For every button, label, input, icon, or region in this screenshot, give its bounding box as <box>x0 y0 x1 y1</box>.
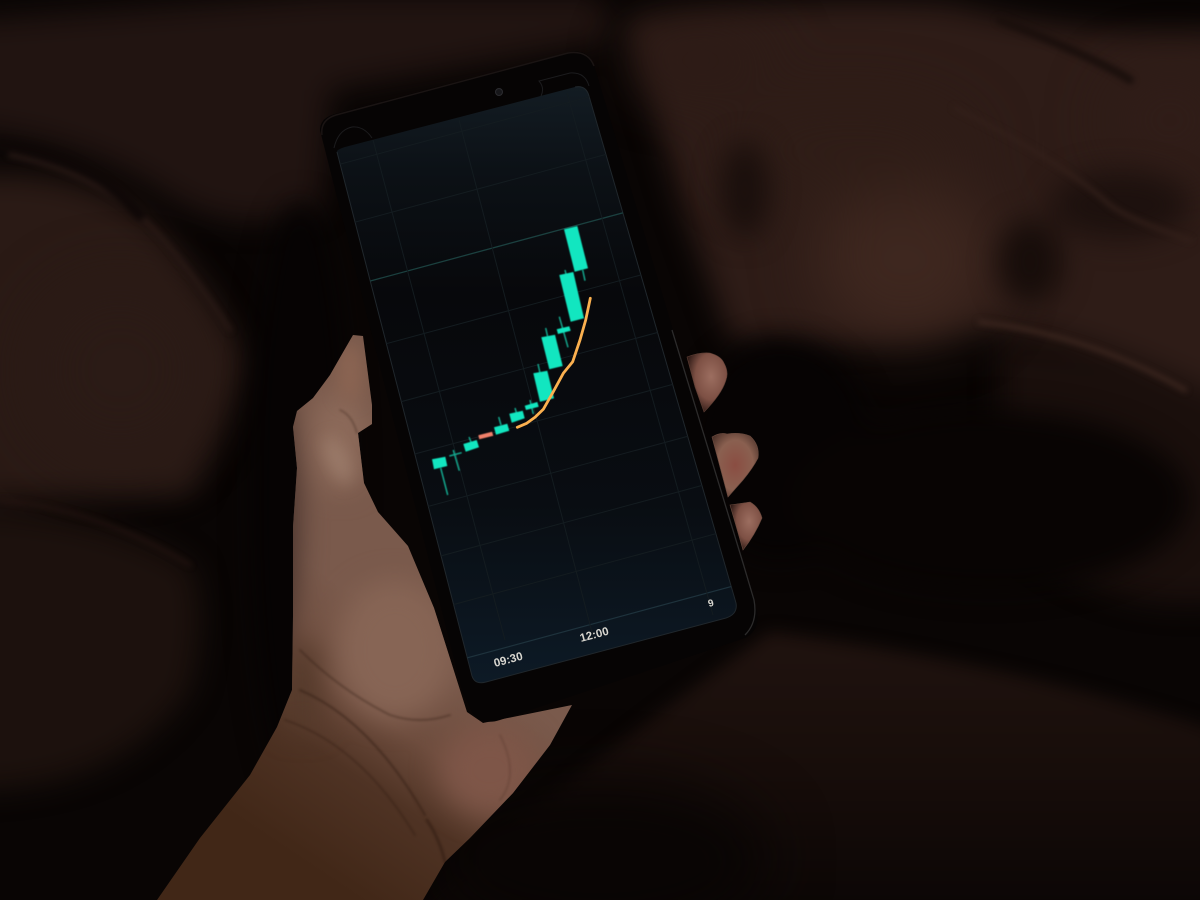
thumb tip highlight <box>336 342 364 402</box>
hand base shape <box>157 335 572 900</box>
right side edge highlight <box>672 330 755 635</box>
front camera <box>496 88 502 96</box>
finger one <box>687 353 727 412</box>
top glass outline <box>334 73 589 148</box>
phone body <box>320 52 758 722</box>
time axis labels: 12:00 <box>579 626 610 645</box>
time axis labels: 09:30 <box>493 651 524 670</box>
chart grid <box>340 148 731 658</box>
candlestick chart <box>432 226 588 495</box>
dark bottom centre <box>430 780 770 900</box>
screen rim <box>337 87 736 683</box>
phone <box>320 52 756 722</box>
screen <box>337 87 736 683</box>
time axis labels <box>493 598 716 670</box>
moving average line <box>517 298 590 427</box>
finger two <box>712 433 758 497</box>
palm creases <box>285 410 510 862</box>
lower blanket fold <box>415 632 1200 900</box>
finger three <box>730 502 762 550</box>
thumb highlight <box>324 441 352 480</box>
time axis labels: 9 <box>707 598 716 610</box>
hand <box>140 320 762 900</box>
phone edge highlight <box>322 53 594 135</box>
